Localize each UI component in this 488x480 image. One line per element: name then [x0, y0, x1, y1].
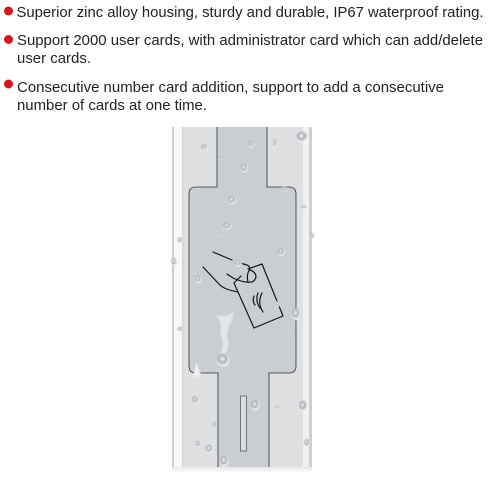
bullet list: [4, 5, 484, 114]
icon: hand holding card: [203, 252, 283, 328]
housing: [172, 127, 312, 467]
bottom reflection: [172, 467, 312, 473]
left edge highlight: [172, 127, 174, 467]
bullet 2: user cards.: [17, 51, 91, 67]
water drops: [171, 132, 314, 467]
card reader device: [171, 127, 314, 473]
bullet 3: [4, 80, 444, 114]
right edge highlight: [303, 127, 309, 467]
bullet 2: [4, 33, 483, 67]
bullet 1: Superior zinc alloy housing, sturdy and durable, IP67 waterproof rating.: [16, 5, 484, 21]
indicator window: [240, 396, 246, 451]
bullet 3: number of cards at one time.: [17, 98, 207, 114]
bullet 2: Support 2000 user cards, with administrator card which can add/delete: [17, 33, 483, 49]
panel outline: [189, 127, 296, 467]
bullet 3: Consecutive number card addition, support to add a consecutive: [17, 80, 444, 96]
front label panel: [189, 127, 296, 467]
icon: contactless waves: [253, 296, 255, 305]
